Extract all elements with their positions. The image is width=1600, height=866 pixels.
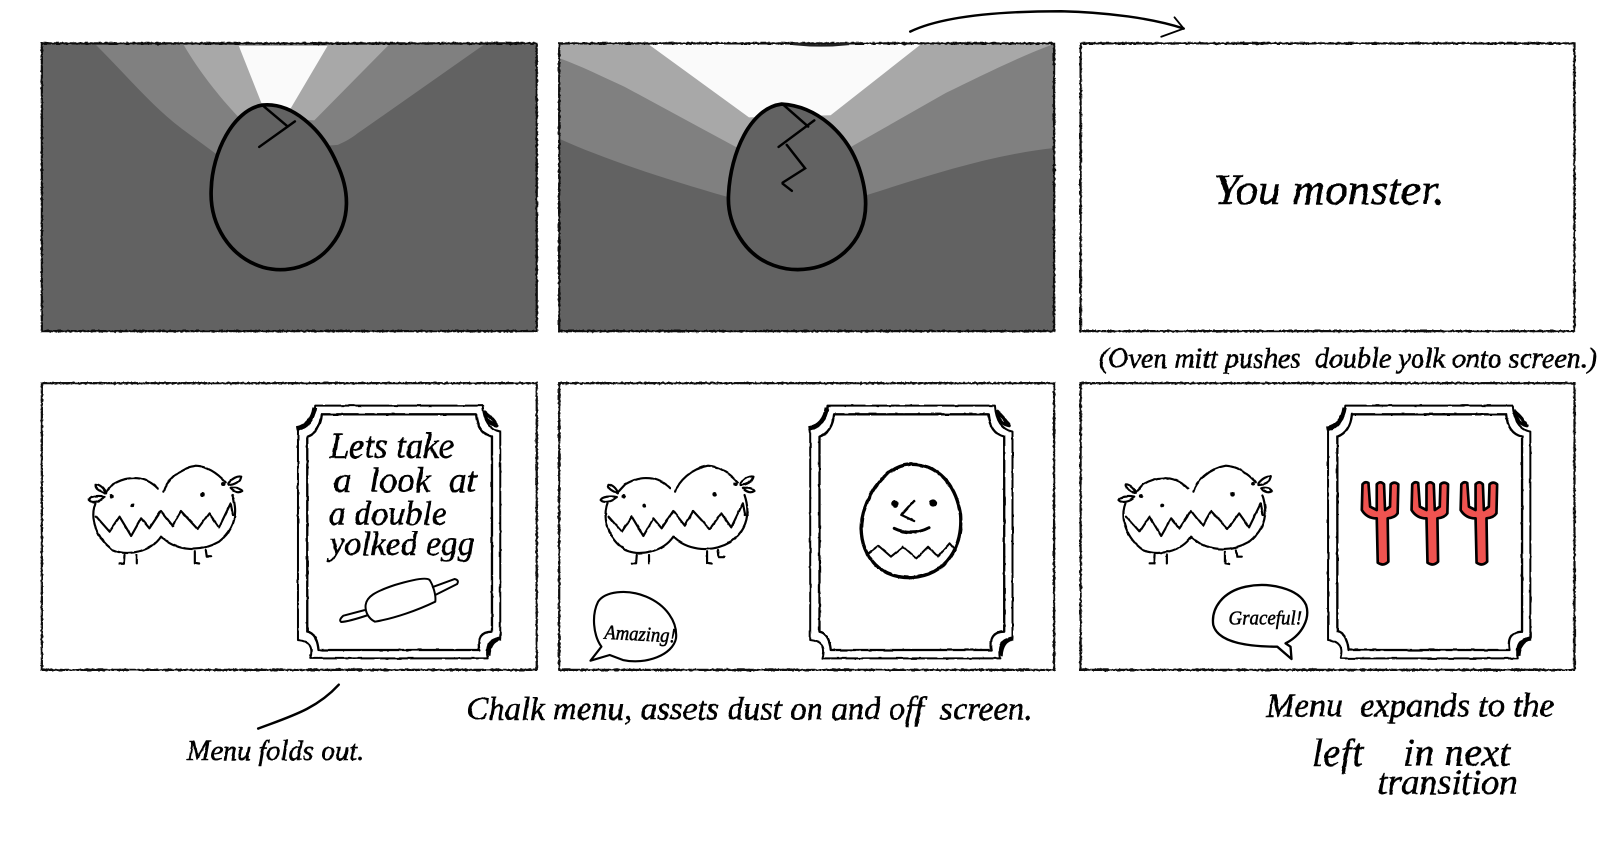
icon: egg	[211, 105, 346, 270]
menu frame	[809, 406, 1013, 658]
text: menu lines: yolked egg	[327, 526, 474, 563]
light rays	[96, 45, 484, 154]
panel: menu folds out	[42, 383, 537, 670]
speech bubble: graceful: Graceful!	[1229, 607, 1302, 629]
caption: menu expands	[1265, 687, 1554, 802]
menu frame	[1326, 406, 1531, 658]
caption: menu expands: Menu expands to the	[1265, 687, 1554, 724]
arrow: menu fold pointer	[258, 685, 339, 729]
panel: egg with longer crack	[559, 43, 1054, 331]
caption: menu expands: transition	[1378, 762, 1517, 802]
panel: you monster	[1081, 43, 1574, 331]
speech bubble: amazing: Amazing!	[602, 622, 676, 647]
text: you monster: You monster.	[1214, 166, 1445, 214]
speech bubble: amazing	[590, 592, 676, 661]
speech bubble: graceful	[1213, 585, 1307, 659]
caption: oven mitt: (Oven mitt pushes double yolk onto screen.)	[1099, 343, 1597, 374]
icon: double chick	[1118, 466, 1272, 564]
icon: crack	[259, 105, 295, 147]
icon: egg	[728, 104, 866, 270]
caption: menu expands: left in next	[1312, 731, 1511, 774]
light rays	[559, 44, 1054, 197]
panel: egg with first crack	[42, 43, 537, 331]
arrow: transition to next frame	[910, 11, 1184, 37]
menu frame	[296, 406, 501, 658]
text: menu lines: a double	[329, 495, 447, 532]
panel: forks menu	[1081, 383, 1574, 670]
caption: menu folds out: Menu folds out.	[186, 736, 364, 767]
text: menu lines: a look at	[334, 460, 478, 500]
icon: crack	[779, 105, 814, 191]
panel: chalk menu	[559, 383, 1054, 670]
icon: three red forks	[1362, 482, 1497, 564]
icon: double chick	[601, 466, 754, 564]
icon: double chick	[88, 466, 242, 564]
icon: rolling pin	[340, 579, 458, 622]
caption: chalk menu: Chalk menu, assets dust on and off screen.	[466, 691, 1033, 727]
icon: smiling egg	[861, 464, 961, 578]
text: menu lines	[327, 425, 478, 563]
text: menu lines: Lets take	[329, 425, 454, 466]
